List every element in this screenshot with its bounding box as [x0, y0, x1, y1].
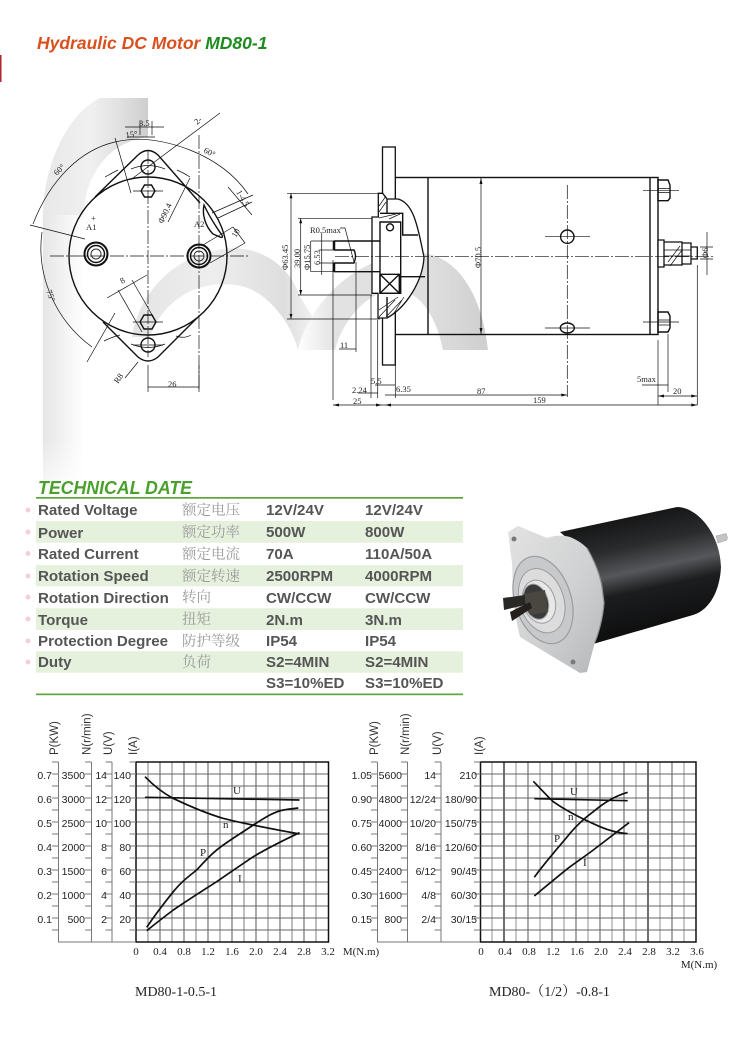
N scale labels: 800: [384, 914, 402, 926]
U scale labels: 4/8: [421, 890, 436, 902]
dimension labels: [280, 225, 710, 406]
axis titles: I(A): [128, 736, 140, 755]
front view labels: 3.5: [139, 118, 150, 128]
P scale labels: 0.15: [352, 914, 372, 926]
I scale labels: 60/30: [451, 890, 477, 902]
P scale labels: 1.05: [352, 770, 372, 782]
U scale labels: 2/4: [421, 914, 436, 926]
P scale labels: 0.45: [352, 866, 372, 878]
torque axis labels: 0.4: [498, 946, 512, 958]
dimension labels: 20: [673, 386, 682, 396]
P scale labels: [352, 770, 372, 926]
N scale labels: 1500: [62, 866, 85, 878]
torque axis labels: M(N.m): [343, 946, 380, 958]
axis titles: P(KW): [369, 721, 381, 755]
row: rotation speed: Rotation Speed: [38, 568, 149, 585]
I scale labels: 60: [119, 866, 131, 878]
chart: MD80-1-0.5-1 performance curves: [37, 713, 380, 958]
P scale labels: 0.3: [37, 866, 52, 878]
N scale labels: 5600: [379, 770, 402, 782]
row: rotation speed: [38, 567, 432, 585]
torque axis labels: 2.8: [297, 946, 311, 958]
front view labels: A1: [86, 222, 96, 232]
torque axis labels: 3.2: [321, 946, 335, 958]
U scale labels: 2: [101, 914, 107, 926]
row: power: Power: [38, 525, 83, 542]
I scale labels: 90/45: [451, 866, 477, 878]
N scale labels: 2500: [62, 818, 85, 830]
I scale labels: 40: [119, 890, 131, 902]
U scale labels: 8: [101, 842, 107, 854]
I scale labels: [445, 770, 477, 926]
torque axis labels: 2.4: [618, 946, 632, 958]
I scale labels: 20: [119, 914, 131, 926]
row: protection degree: IP54: [266, 633, 298, 650]
end bolts and terminal: [643, 180, 697, 332]
I scale labels: 140: [113, 770, 131, 782]
silver flange and collar: [508, 526, 604, 673]
torque axis labels: M(N.m): [681, 959, 718, 971]
front view labels: Φ90.4: [156, 201, 174, 225]
curve letters: U: [233, 785, 241, 797]
curve letters: n: [223, 819, 229, 831]
front view labels: 8: [118, 275, 127, 286]
row: rotation speed: 额定转速: [182, 567, 240, 585]
dimension labels: 5.5: [371, 376, 382, 386]
torque axis labels: 3.2: [666, 946, 680, 958]
row: rated current: [38, 545, 432, 563]
section heading: technical date: TECHNICAL DATE: [38, 478, 193, 498]
chart caption: MD80-1-0.5-1: MD80-1-0.5-1: [135, 985, 217, 1000]
axis titles: [49, 713, 140, 755]
N scale labels: 3200: [379, 842, 402, 854]
table stripes and rules: [36, 497, 463, 695]
row: rated current: Rated Current: [38, 546, 139, 563]
I scale labels: 210: [459, 770, 477, 782]
row: duty: S2=4MIN: [266, 654, 329, 671]
front view labels: 2-: [192, 114, 204, 127]
black motor can: [560, 507, 721, 644]
dimension labels: 5max: [637, 374, 657, 384]
row: rated current: 70A: [266, 546, 294, 563]
dimension labels: 6.35: [396, 384, 411, 394]
row: rated voltage: [38, 501, 423, 519]
row bullets: [26, 508, 30, 664]
row: rated voltage: 额定电压: [182, 501, 240, 519]
dimension labels: 87: [477, 386, 486, 396]
row: power: 500W: [266, 524, 306, 541]
I scale labels: 30/15: [451, 914, 477, 926]
U scale labels: 6: [101, 866, 107, 878]
row: rotation direction: Rotation Direction: [38, 590, 169, 607]
N scale labels: 2400: [379, 866, 402, 878]
curve letters: I: [238, 873, 242, 885]
row: power: [38, 524, 405, 542]
shaft: [334, 241, 380, 272]
front view labels: A2: [194, 219, 204, 229]
U scale labels: [95, 770, 107, 926]
N scale labels: 1600: [379, 890, 402, 902]
front view labels: R8: [111, 371, 125, 385]
curve letters: n: [568, 811, 574, 823]
row: protection degree: 防护等级: [182, 633, 240, 650]
row: protection degree: [38, 633, 397, 650]
P scale labels: 0.90: [352, 794, 372, 806]
U scale labels: 14: [424, 770, 436, 782]
axis titles: I(A): [474, 736, 486, 755]
torque axis labels: 2.8: [642, 946, 656, 958]
front view labels: +: [91, 213, 96, 223]
torque axis labels: 3.6: [690, 946, 704, 958]
row: torque: Torque: [38, 612, 88, 629]
U scale labels: 6/12: [416, 866, 436, 878]
row: torque: [38, 611, 402, 629]
axis titles: U(V): [432, 731, 444, 755]
row: rated current: 额定电流: [182, 545, 240, 563]
torque axis labels: [478, 946, 718, 971]
P scale labels: 0.7: [37, 770, 52, 782]
chart: MD80-(1/2)-0.8-1 performance curves: [352, 713, 718, 971]
P scale labels: 0.4: [37, 842, 52, 854]
front view labels: 10: [229, 227, 242, 239]
torque axis labels: 0.8: [177, 946, 191, 958]
row: duty: 负荷: [182, 653, 211, 671]
row: rated voltage: 12V/24V: [266, 502, 324, 519]
row: rotation direction: [38, 589, 431, 607]
I scale labels: 100: [113, 818, 131, 830]
row: rotation speed: 4000RPM: [365, 568, 432, 585]
dimension labels: Φ15.75: [302, 245, 312, 270]
P scale labels: 0.75: [352, 818, 372, 830]
dimension labels: 39.00: [292, 249, 302, 268]
I scale labels: 120: [113, 794, 131, 806]
curve letters: P: [554, 833, 560, 845]
N scale labels: 3000: [62, 794, 85, 806]
torque axis labels: 0: [133, 946, 139, 958]
scale axes: [371, 762, 480, 942]
P scale labels: [37, 770, 52, 926]
torque axis labels: 1.6: [570, 946, 584, 958]
side view drawing: [280, 147, 713, 406]
dimension labels: 6.53: [312, 250, 322, 265]
dimension labels: Φ70.5: [473, 247, 483, 268]
U scale labels: 10/20: [410, 818, 436, 830]
U scale labels: 14: [95, 770, 107, 782]
collar shadow edge: [587, 548, 604, 642]
front view labels: 60°: [202, 145, 217, 159]
mounting holes: [133, 160, 163, 352]
front view labels: 75°: [44, 288, 58, 303]
P scale labels: 0.60: [352, 842, 372, 854]
P scale labels: 0.2: [37, 890, 52, 902]
curve letters: P: [200, 847, 206, 859]
torque axis labels: 1.6: [225, 946, 239, 958]
P scale labels: 0.5: [37, 818, 52, 830]
background watermark swooshes: [43, 98, 488, 500]
torque axis labels: 0.8: [522, 946, 536, 958]
flange mounting holes: [512, 536, 576, 664]
curve letters: [200, 785, 242, 885]
U scale labels: 4: [101, 890, 107, 902]
I scale labels: 80: [119, 842, 131, 854]
dimension labels: R0.5max: [310, 225, 342, 235]
row: rated voltage: 12V/24V: [365, 502, 423, 519]
torque axis labels: 1.2: [201, 946, 215, 958]
terminals A1 and A2: [84, 242, 210, 268]
axis titles: N(r/min): [400, 713, 412, 755]
I scale labels: [113, 770, 131, 926]
N scale labels: 4000: [379, 818, 402, 830]
P scale labels: 0.30: [352, 890, 372, 902]
bell housing and bearing: [372, 193, 425, 318]
row: torque: 扭矩: [182, 611, 211, 628]
row: rotation direction: CW/CCW: [266, 590, 332, 607]
axis titles: U(V): [103, 731, 115, 755]
row: rated current: 110A/50A: [365, 546, 432, 563]
centre lines and dimensions: [30, 113, 253, 392]
row: duty continued: S3=10%ED: [266, 675, 345, 692]
front view labels: 15°: [125, 128, 138, 140]
torque axis labels: 0.4: [153, 946, 167, 958]
row: duty: [38, 653, 428, 671]
N scale labels: [379, 770, 402, 926]
dimension labels: Φ6: [700, 248, 710, 258]
front view labels: 1-4.5: [234, 188, 252, 208]
I scale labels: 150/75: [445, 818, 477, 830]
dimension labels: Φ63.45: [280, 245, 290, 270]
row: rotation direction: 转向: [182, 589, 211, 606]
N scale labels: 1000: [62, 890, 85, 902]
curve letters: [554, 786, 587, 869]
row: power: 800W: [365, 524, 405, 541]
axis titles: N(r/min): [82, 713, 94, 755]
torque axis labels: 2.0: [249, 946, 263, 958]
N scale labels: 2000: [62, 842, 85, 854]
row: torque: 2N.m: [266, 612, 303, 629]
row: duty: Duty: [38, 654, 72, 671]
N scale labels: 3500: [62, 770, 85, 782]
torque axis labels: 2.4: [273, 946, 287, 958]
torque axis labels: 2.0: [594, 946, 608, 958]
axis titles: P(KW): [49, 721, 61, 755]
curve letters: I: [583, 857, 587, 869]
dimension labels: 2.24: [352, 385, 368, 395]
dimension labels: 159: [533, 395, 546, 405]
torque axis labels: [133, 946, 380, 958]
U scale labels: 8/16: [416, 842, 436, 854]
motor body: [382, 147, 658, 365]
slotted output shaft: [503, 590, 548, 621]
I scale labels: 180/90: [445, 794, 477, 806]
front view labels: [44, 114, 252, 389]
motor photo: [502, 507, 727, 673]
row: protection degree: Protection Degree: [38, 633, 168, 650]
red edge mark: [0, 55, 2, 82]
U scale labels: [410, 770, 436, 926]
row: rotation direction: CW/CCW: [365, 590, 431, 607]
rear shaft stub: [716, 534, 727, 543]
curve letters: U: [570, 786, 578, 798]
P scale labels: 0.1: [37, 914, 52, 926]
flange outline and body circle: [69, 150, 227, 361]
dimension labels: 11: [340, 340, 348, 350]
scale axes: [52, 762, 136, 942]
row: protection degree: IP54: [365, 633, 397, 650]
axis titles: [369, 713, 486, 755]
page title: Hydraulic DC Motor MD80-1: [37, 33, 267, 53]
front view labels: 60°: [51, 162, 67, 177]
row: rated voltage: Rated Voltage: [38, 502, 138, 519]
grid: [480, 762, 696, 942]
grid: [136, 762, 328, 942]
U scale labels: 10: [95, 818, 107, 830]
P scale labels: 0.6: [37, 794, 52, 806]
dimension labels: 25: [353, 396, 362, 406]
specification table: [26, 497, 463, 695]
U scale labels: 12/24: [410, 794, 436, 806]
row: power: 额定功率: [182, 524, 240, 541]
curves U n P I: [533, 781, 629, 896]
boss rings: [502, 549, 584, 651]
torque axis labels: 0: [478, 946, 484, 958]
chart caption: MD80-(1/2)-0.8-1: MD80-（1/2）-0.8-1: [489, 984, 610, 1000]
vent holes and centre lines: [335, 185, 713, 397]
torque axis labels: 1.2: [546, 946, 560, 958]
front view labels: 26: [168, 379, 176, 389]
row: rotation speed: 2500RPM: [266, 568, 333, 585]
front view drawing: [30, 113, 253, 392]
N scale labels: 500: [67, 914, 85, 926]
row: torque: 3N.m: [365, 612, 402, 629]
curves U n P I: [145, 777, 300, 931]
U scale labels: 12: [95, 794, 107, 806]
dimension lines: [287, 178, 713, 406]
N scale labels: 4800: [379, 794, 402, 806]
row: duty continued: S3=10%ED: [365, 675, 444, 692]
row: duty: S2=4MIN: [365, 654, 428, 671]
row: duty continued: [266, 675, 444, 692]
I scale labels: 120/60: [445, 842, 477, 854]
N scale labels: [62, 770, 85, 926]
